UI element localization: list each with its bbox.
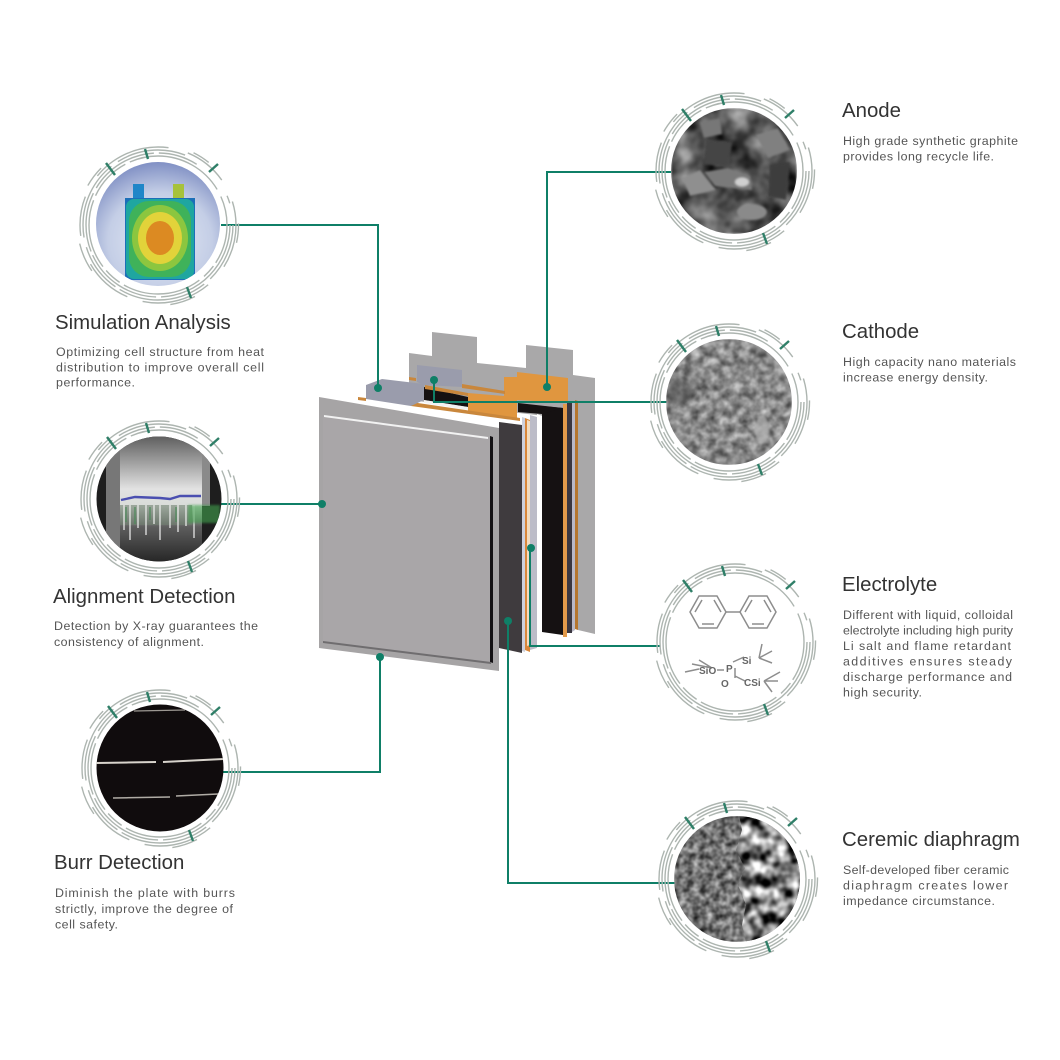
icon: thermal simulation circle <box>78 144 238 306</box>
rear electrode layers <box>518 400 578 652</box>
text: burr description <box>55 886 235 932</box>
text: electrolyte description: Different with liquid, colloidal <box>843 608 1013 622</box>
text: alignment description: consistency of alignment. <box>54 635 204 649</box>
panel: anode <box>654 90 1018 252</box>
text: cathode description: High capacity nano materials <box>843 355 1016 369</box>
icon: molecule structure circle: O <box>721 679 729 690</box>
panel: burr detection <box>54 688 240 932</box>
dark separator layer <box>499 422 522 653</box>
orange strip edges <box>358 377 520 421</box>
panel: simulation analysis <box>55 144 265 390</box>
text: electrolyte description: Li salt and flame retardant <box>843 639 1012 653</box>
text: electrolyte description: high security. <box>843 686 922 700</box>
text: ceramic description <box>843 863 1009 908</box>
icon: ceramic micrograph circle <box>656 798 818 960</box>
connector: anode <box>547 172 671 387</box>
text: simulation description: distribution to improve overall cell <box>56 360 264 374</box>
icon: molecule structure circle: Si <box>742 656 752 667</box>
orange anode tabs <box>468 372 568 418</box>
text: anode description: provides long recycle life. <box>843 150 994 164</box>
front casing plate <box>319 397 499 671</box>
icon: molecule structure circle: P <box>726 664 733 675</box>
connector lines <box>220 172 675 883</box>
text: alignment description <box>54 619 258 649</box>
panel: electrolyte <box>654 562 1014 722</box>
text: electrolyte description: electrolyte including high purity <box>843 624 1014 638</box>
text: cathode description: increase energy density. <box>843 370 988 384</box>
heading: electrolyte: Electrolyte <box>842 574 937 596</box>
back gray sheet with tabs <box>409 332 595 634</box>
text: ceramic description: impedance circumstance. <box>843 894 995 908</box>
connector: alignment detection <box>220 503 322 505</box>
icon: x-ray alignment circle <box>78 418 240 580</box>
heading: burr detection: Burr Detection <box>54 852 184 874</box>
text: electrolyte description: discharge performance and <box>843 670 1012 684</box>
text: burr description: cell safety. <box>55 918 118 932</box>
panel: ceramic diaphragm <box>656 798 1020 960</box>
text: electrolyte description <box>843 608 1014 700</box>
text: cathode description <box>843 355 1016 384</box>
text: burr description: Diminish the plate with burrs <box>55 886 235 900</box>
heading: simulation analysis: Simulation Analysis <box>55 312 231 334</box>
connector: cathode <box>434 381 667 402</box>
text: anode description <box>843 134 1018 164</box>
heading: anode: Anode <box>842 100 901 122</box>
heading: cathode: Cathode <box>842 321 919 343</box>
blue gray cathode tabs <box>366 365 462 406</box>
text: burr description: strictly, improve the degree of <box>55 902 234 916</box>
icon: graphite micrograph circle <box>654 90 814 252</box>
heading: alignment detection: Alignment Detection <box>53 586 235 608</box>
connector: burr detection <box>222 657 380 772</box>
text: anode description: High grade synthetic graphite <box>843 134 1018 148</box>
connector: ceramic diaphragm <box>508 621 675 883</box>
black gap under tabs <box>424 387 468 407</box>
text: simulation description: Optimizing cell structure from heat <box>56 345 265 359</box>
text: ceramic description: diaphragm creates lower <box>843 878 1008 892</box>
panel: alignment detection <box>53 418 258 649</box>
text: simulation description <box>56 345 265 390</box>
text: ceramic description: Self-developed fiber ceramic <box>843 863 1009 877</box>
text: electrolyte description: additives ensures steady <box>843 654 1013 668</box>
icon: molecule structure circle: CSi <box>744 678 761 689</box>
icon: burr detection circle <box>80 688 240 848</box>
text: alignment description: Detection by X-ray guarantees the <box>54 619 258 633</box>
text: simulation description: performance. <box>56 376 135 390</box>
icon: molecule structure circle <box>654 562 816 722</box>
connector end dots <box>318 376 551 661</box>
heading: ceramic diaphragm: Ceremic diaphragm <box>842 829 1020 851</box>
exploded battery cell diagram <box>319 332 595 671</box>
panel: cathode <box>648 321 1016 482</box>
icon: nano material micrograph circle <box>648 322 810 482</box>
connector: electrolyte <box>530 548 660 646</box>
icon: molecule structure circle: SiO <box>699 666 716 677</box>
connector: simulation analysis <box>221 225 378 388</box>
